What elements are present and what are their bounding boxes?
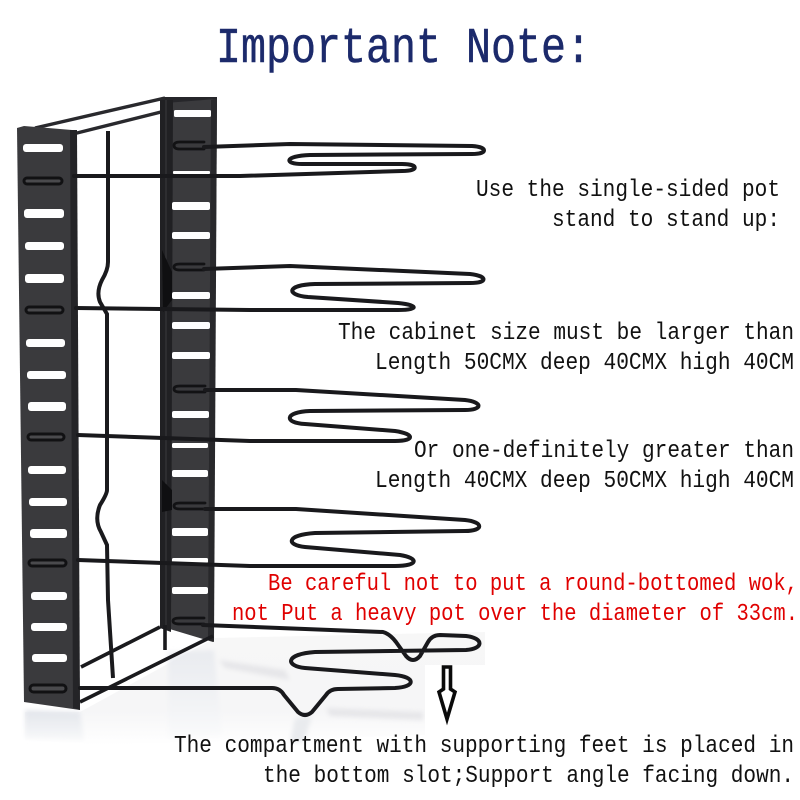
note: cabinet size	[338, 320, 794, 377]
shelf arm 5 with supporting feet	[80, 625, 480, 715]
title: Important Note:	[216, 21, 591, 78]
wire hooks in slots	[24, 142, 205, 692]
shelf arm 2	[76, 266, 484, 310]
note: bottom slot	[174, 733, 794, 790]
back wire supports	[97, 131, 113, 678]
pot rack	[17, 97, 484, 715]
bottom rails	[80, 625, 213, 702]
note: alternative size	[375, 438, 794, 495]
note: single-sided stand	[476, 177, 780, 234]
shelf arm 3	[78, 390, 478, 441]
warning note	[232, 571, 798, 628]
shelf arm 1	[74, 144, 484, 176]
floor reflection	[25, 632, 485, 745]
right panel slots	[172, 110, 211, 594]
down arrow	[425, 665, 475, 737]
left upright panel	[17, 126, 80, 710]
right upright panel	[160, 99, 217, 642]
top rails	[35, 97, 217, 134]
left panel slots	[23, 144, 67, 662]
shelf arm 4	[78, 509, 479, 566]
